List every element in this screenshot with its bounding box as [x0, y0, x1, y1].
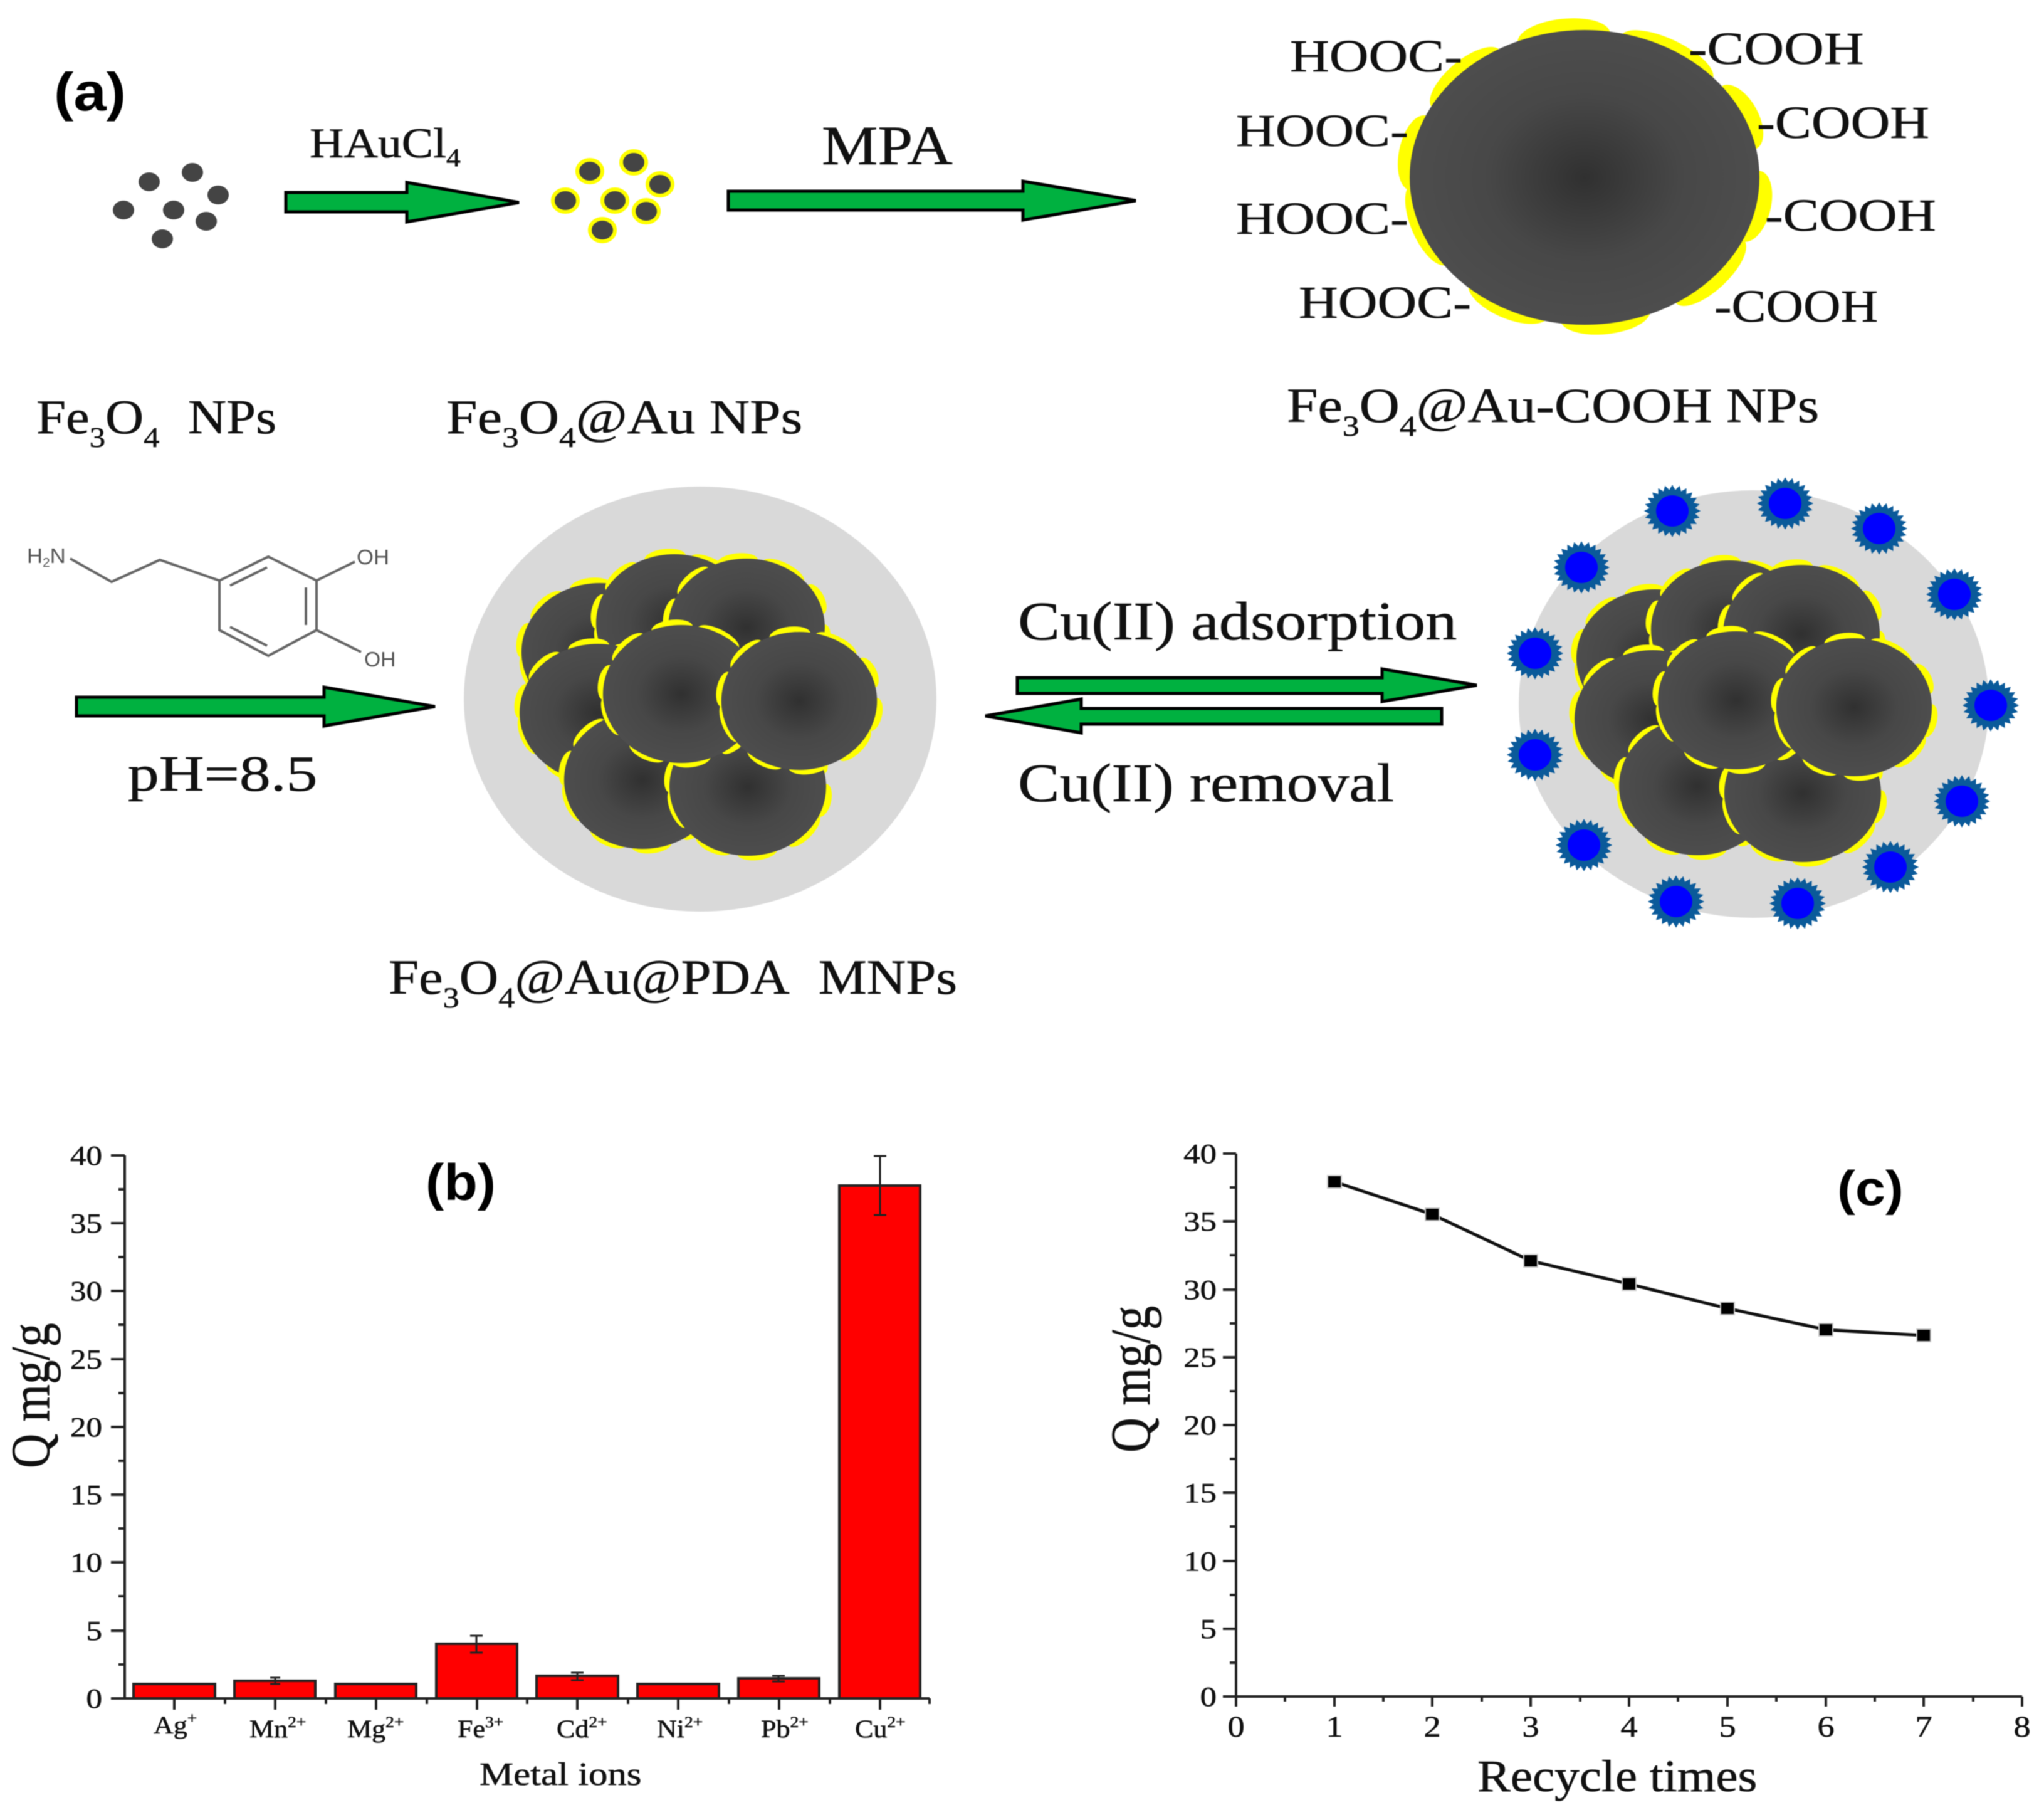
axes and ticks [111, 1155, 930, 1710]
category labels: 2+ [887, 1713, 906, 1731]
caption: Fe3O4 NPs: 3 [90, 422, 105, 453]
y axis title: Q mg/g: Q mg/g [0, 1323, 61, 1468]
panel label (a): (a) [54, 63, 126, 122]
caption: Fe3O4@Au-COOH NPs: Fe [1287, 379, 1343, 433]
y axis tick labels: 25 [70, 1345, 102, 1375]
icon: cluster with adsorbed Cu ions [1507, 477, 2019, 930]
caption: Fe3O4@Au-COOH NPs: @Au-COOH NPs [1417, 379, 1819, 433]
x axis title: Metal ions: Metal ions [480, 1757, 641, 1792]
arrow: removal [985, 699, 1442, 733]
panel label (c): (c) [1837, 1161, 1904, 1216]
icon: dopamine structure [27, 545, 396, 671]
icon: Fe3O4@Au@PDA cluster [464, 487, 936, 912]
caption: Fe3O4 NPs: Fe [36, 391, 90, 444]
label: HOOC upper left: HOOC- [1236, 106, 1408, 156]
category labels: Mn [249, 1716, 288, 1744]
label: COOH bottom right: -COOH [1714, 281, 1878, 332]
data markers [1328, 1176, 1931, 1342]
icon: dopamine structure: N [50, 545, 66, 568]
category labels: Cd [557, 1716, 589, 1744]
caption: Fe3O4@Au@PDA MNPs: O [459, 950, 498, 1004]
icon: dopamine structure: OH [357, 546, 389, 569]
label: HOOC bottom left: HOOC- [1299, 278, 1471, 328]
panel b: bar chart of metal ion adsorption [0, 1141, 930, 1792]
caption: Fe3O4@Au NPs: 3 [502, 421, 519, 453]
caption: Fe3O4 NPs: NPs [175, 391, 276, 444]
y axis tick labels: 20 [70, 1413, 102, 1443]
x axis tick labels: 8 [2013, 1710, 2031, 1744]
caption: Fe3O4@Au NPs: 4 [559, 421, 576, 453]
category labels: Ag [154, 1712, 187, 1740]
y axis tick labels: 10 [70, 1548, 102, 1578]
caption: Fe3O4@Au@PDA MNPs: 3 [443, 981, 459, 1014]
y axis tick labels: 15 [1183, 1478, 1217, 1508]
category labels: Pb [761, 1716, 790, 1744]
panel a: synthesis scheme [27, 14, 2019, 1014]
bar chart bars [134, 1186, 920, 1698]
y axis tick labels: 5 [1200, 1614, 1217, 1644]
caption: Fe3O4@Au@PDA MNPs: MNPs [805, 950, 957, 1004]
caption: Fe3O4@Au@PDA MNPs: 4 [498, 981, 515, 1014]
panel c: line chart of recycle times [1100, 1139, 2031, 1801]
x axis tick labels: 5 [1719, 1710, 1736, 1744]
category labels: 2+ [790, 1713, 809, 1731]
caption: Fe3O4 NPs: 4 [144, 422, 159, 453]
caption: Fe3O4@Au NPs: Fe [446, 391, 502, 445]
category labels: 2+ [589, 1713, 607, 1731]
label: HAuCl4: HAuCl [310, 119, 446, 167]
caption: Fe3O4@Au@PDA MNPs: @Au@PDA [515, 950, 790, 1004]
x axis tick labels: 6 [1817, 1710, 1835, 1744]
category labels [154, 1710, 906, 1744]
caption: Fe3O4@Au NPs: @Au NPs [576, 391, 802, 445]
icon: Fe3O4@Au nanoparticles [553, 151, 673, 241]
label: Cu(II) removal: Cu(II) removal [1018, 754, 1394, 814]
category labels: 2+ [385, 1713, 404, 1731]
caption: Fe3O4@Au-COOH NPs: O [1360, 379, 1400, 433]
x axis title: Recycle times: Recycle times [1477, 1752, 1757, 1801]
y axis title: Q mg/g: Q mg/g [1100, 1306, 1162, 1453]
label: HAuCl4: 4 [446, 144, 461, 172]
y axis tick labels: 20 [1183, 1410, 1217, 1441]
arrow: MPA step [728, 181, 1136, 220]
y axis tick labels: 30 [70, 1276, 102, 1307]
category labels: Mg [347, 1716, 385, 1744]
label: COOH upper right: -COOH [1757, 98, 1929, 148]
icon: dopamine structure: H [27, 545, 43, 568]
x axis tick labels: 7 [1915, 1710, 1932, 1744]
label: HOOC top left: HOOC- [1290, 31, 1462, 82]
icon: large Fe3O4@Au-COOH particle [1391, 14, 1779, 339]
x axis tick labels: 0 [1227, 1710, 1245, 1744]
y axis tick labels: 35 [1183, 1206, 1217, 1237]
arrow: adsorption [1017, 669, 1477, 702]
category labels: 3+ [485, 1713, 503, 1731]
y axis tick labels [70, 1141, 102, 1714]
y axis tick labels: 40 [1183, 1139, 1217, 1169]
caption: Fe3O4 NPs: O [105, 391, 144, 444]
label: HOOC lower left: HOOC- [1236, 194, 1408, 244]
y axis tick labels [1183, 1139, 1217, 1712]
caption: Fe3O4@Au@PDA MNPs: Fe [389, 950, 443, 1004]
icon: Fe3O4 nanoparticles [113, 163, 229, 248]
axes and ticks [1223, 1154, 2022, 1707]
x axis tick labels: 2 [1423, 1710, 1441, 1744]
label: Cu(II) adsorption: Cu(II) adsorption [1018, 591, 1457, 651]
label: COOH top right: -COOH [1689, 23, 1864, 74]
data line [1334, 1182, 1924, 1335]
icon: dopamine structure: 2 [43, 555, 50, 570]
category labels: 2+ [684, 1713, 703, 1731]
y axis tick labels: 5 [86, 1616, 102, 1646]
category labels: + [187, 1710, 197, 1727]
y axis tick labels: 10 [1183, 1546, 1217, 1577]
icon: dopamine structure: OH [364, 648, 396, 671]
category labels: Ni [657, 1716, 684, 1744]
label: MPA: MPA [822, 114, 953, 177]
y axis tick labels: 30 [1183, 1275, 1217, 1305]
x axis tick labels [1227, 1710, 2031, 1744]
caption: Fe3O4@Au-COOH NPs: 3 [1343, 409, 1360, 442]
y axis tick labels: 40 [70, 1141, 102, 1171]
category labels: 2+ [288, 1713, 306, 1731]
caption: Fe3O4@Au-COOH NPs: 4 [1400, 409, 1417, 442]
label: COOH lower right: -COOH [1765, 191, 1936, 241]
error bars [270, 1156, 886, 1684]
y axis tick labels: 0 [1200, 1681, 1217, 1712]
label: pH=8.5: pH=8.5 [128, 745, 317, 802]
arrow: HAuCl4 step [286, 182, 519, 222]
y axis tick labels: 35 [70, 1209, 102, 1239]
panel label (b): (b) [426, 1154, 496, 1211]
y axis tick labels: 15 [70, 1480, 102, 1510]
x axis tick labels: 1 [1326, 1710, 1343, 1744]
category labels: Fe [458, 1716, 485, 1744]
category labels: Cu [855, 1716, 887, 1744]
arrow: polydopamine step [76, 687, 435, 726]
y axis tick labels: 25 [1183, 1342, 1217, 1373]
y axis tick labels: 0 [86, 1684, 102, 1714]
x axis tick labels: 4 [1620, 1710, 1638, 1744]
caption: Fe3O4@Au NPs: O [519, 391, 559, 445]
x axis tick labels: 3 [1522, 1710, 1539, 1744]
